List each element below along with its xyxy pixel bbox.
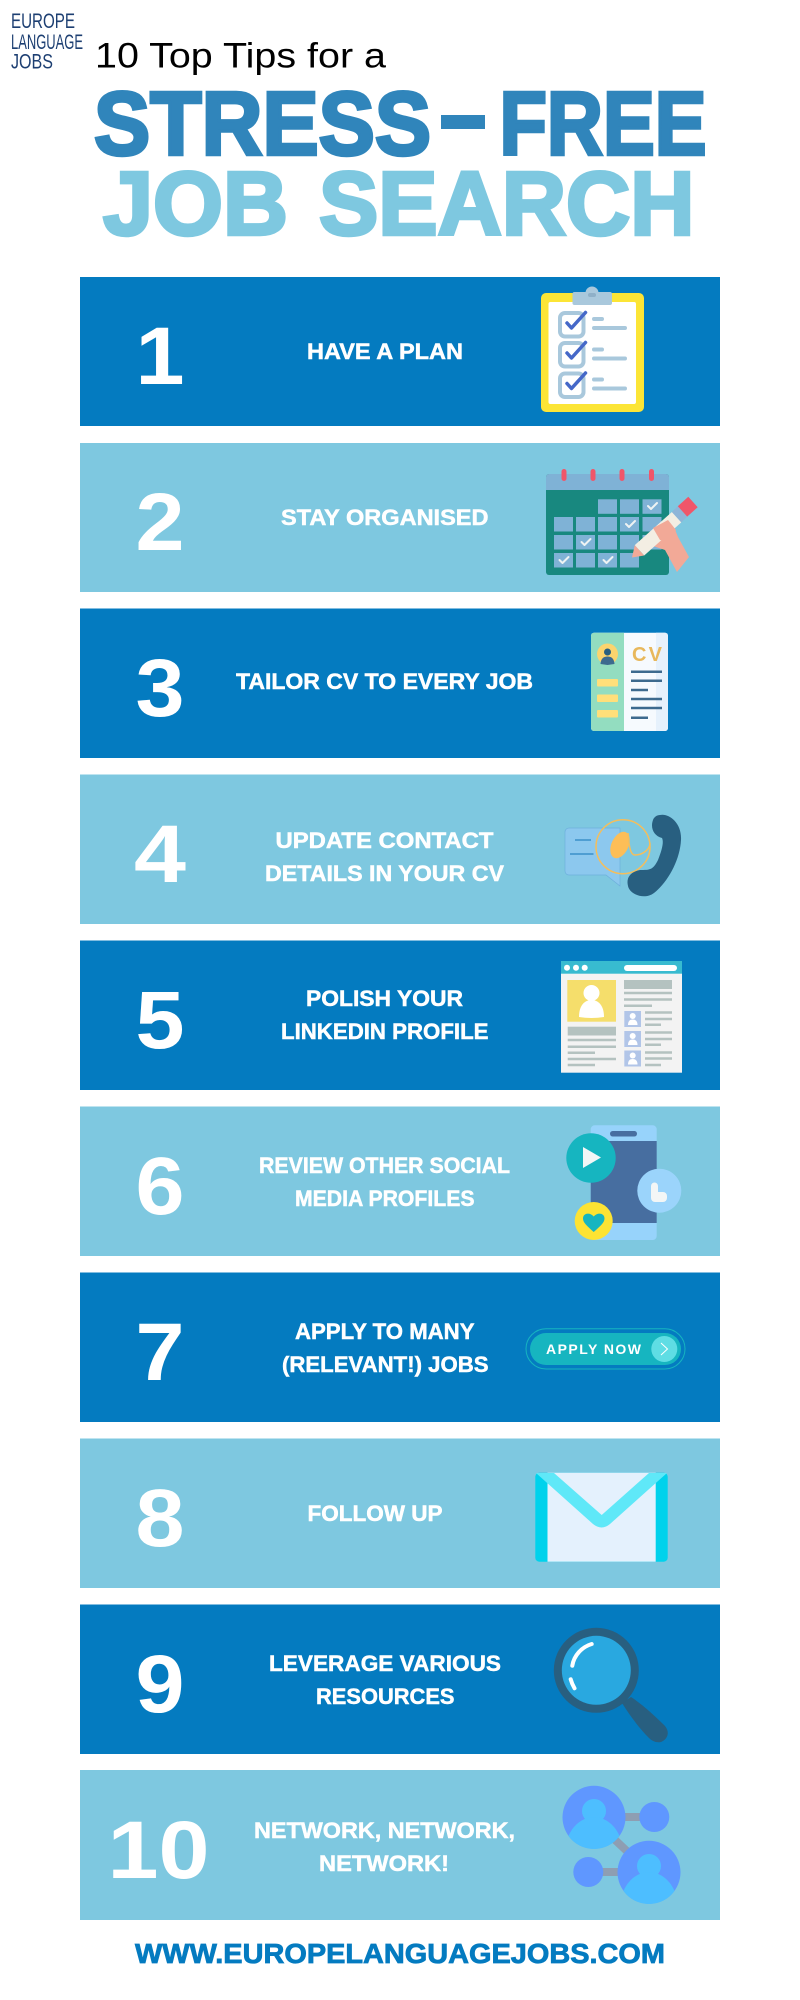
- heading: job search: SEARCH: [319, 154, 694, 254]
- label: [281, 986, 488, 1044]
- footer URL: WWW.EUROPELANGUAGEJOBS.COM: [135, 1938, 665, 1969]
- number 10: 10: [108, 1805, 210, 1896]
- heading: job search: [103, 154, 694, 254]
- label: NETWORK!: [319, 1851, 449, 1876]
- icon: apply now button: APPLY NOW: [546, 1341, 642, 1357]
- icon: clipboard: [541, 286, 644, 412]
- panel: tip 1: [80, 277, 720, 426]
- subtitle: 10 Top Tips for a: [95, 37, 387, 76]
- number 9: 9: [136, 1639, 184, 1730]
- label: UPDATE CONTACT: [276, 828, 494, 853]
- heading: stress-free: [94, 74, 706, 174]
- heading: stress-free: FREE: [500, 74, 706, 174]
- icon: contact bubble and phone: [565, 815, 681, 896]
- title block: [94, 37, 706, 254]
- label: LEVERAGE VARIOUS: [269, 1651, 501, 1676]
- panel: tip 10: [80, 1770, 720, 1920]
- bar: [80, 774, 720, 924]
- icon: magnifying glass: [554, 1628, 668, 1742]
- label: [259, 1153, 510, 1211]
- label: HAVE A PLAN: [307, 339, 463, 364]
- number 2: 2: [136, 477, 184, 568]
- label: [282, 1319, 488, 1377]
- icon: envelope: [535, 1473, 668, 1562]
- icon: apply now button: [526, 1329, 685, 1369]
- label: [265, 828, 504, 886]
- panel: tip 7: [80, 1272, 720, 1422]
- heading: job search: JOB: [103, 154, 288, 254]
- bar: [80, 940, 720, 1090]
- panel: tip 4: [80, 774, 720, 924]
- number 6: 6: [136, 1141, 184, 1232]
- label: POLISH YOUR: [306, 986, 463, 1011]
- label: FOLLOW UP: [308, 1501, 442, 1526]
- icon: CV document: [591, 633, 668, 731]
- panel: tip 2: [80, 443, 720, 592]
- bar: [80, 1438, 720, 1588]
- label: RESOURCES: [316, 1684, 454, 1709]
- icon: social phone: [566, 1125, 681, 1240]
- number 4: 4: [134, 809, 186, 900]
- label: LINKEDIN PROFILE: [281, 1019, 488, 1044]
- bar: [80, 277, 720, 426]
- heading: stress-free: STRESS: [94, 74, 431, 174]
- bar: [80, 1770, 720, 1920]
- number 7: 7: [136, 1307, 184, 1398]
- bar: [80, 443, 720, 592]
- bar: [80, 608, 720, 758]
- label: NETWORK, NETWORK,: [254, 1818, 515, 1843]
- number 3: 3: [136, 643, 184, 734]
- label: APPLY TO MANY: [295, 1319, 475, 1344]
- number 8: 8: [136, 1473, 184, 1564]
- bar: [80, 1604, 720, 1754]
- number 5: 5: [136, 975, 184, 1066]
- panel: tip 5: [80, 940, 720, 1090]
- icon: network of people: [562, 1786, 680, 1904]
- icon: CV document: CV: [632, 644, 663, 666]
- logo: Europe Language Jobs: EUROPE: [11, 10, 75, 33]
- label: TAILOR CV TO EVERY JOB: [236, 669, 533, 694]
- label: STAY ORGANISED: [281, 505, 488, 530]
- label: DETAILS IN YOUR CV: [265, 861, 504, 886]
- panel: tip 9: [80, 1604, 720, 1754]
- panel: tip 3: [80, 608, 720, 758]
- panel: tip 6: [80, 1106, 720, 1256]
- icon: profile page: [561, 961, 682, 1073]
- logo: Europe Language Jobs: JOBS: [11, 50, 53, 74]
- label: [269, 1651, 501, 1709]
- panel: tip 8: [80, 1438, 720, 1588]
- label: (RELEVANT!) JOBS: [282, 1352, 488, 1377]
- bar: [80, 1106, 720, 1256]
- bar: [80, 1272, 720, 1422]
- logo: Europe Language Jobs: [11, 10, 83, 74]
- logo: Europe Language Jobs: LANGUAGE: [11, 31, 83, 54]
- icon: calendar: [546, 469, 698, 575]
- label: [254, 1818, 515, 1876]
- label: MEDIA PROFILES: [295, 1186, 474, 1211]
- number 1: 1: [136, 311, 184, 402]
- label: REVIEW OTHER SOCIAL: [259, 1153, 510, 1178]
